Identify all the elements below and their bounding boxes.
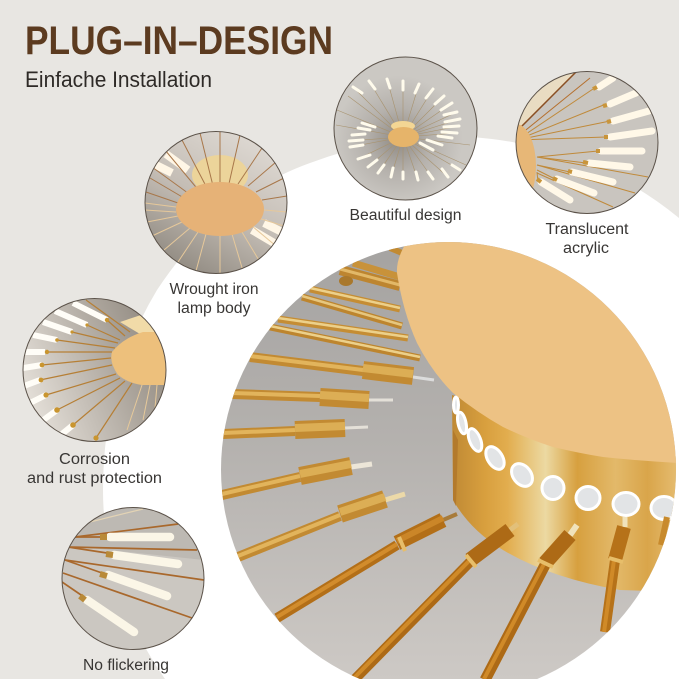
rod 8 [484, 525, 577, 679]
circle: translucent acrylic [516, 72, 658, 213]
ceiling disc [388, 127, 419, 147]
band wall edge [453, 430, 458, 506]
rod 1 [250, 356, 434, 380]
label: no flickering: No flickering [83, 657, 169, 674]
lamps [23, 303, 107, 434]
white backdrop shape [103, 137, 679, 679]
subtitle: Einfache Installation [25, 67, 212, 92]
rod 3 [223, 426, 368, 434]
bright top wedge [519, 74, 573, 126]
acrylic tubes [87, 537, 178, 632]
title: PLUG–IN–DESIGN [25, 19, 333, 63]
label: lamp body: lamp body [178, 300, 251, 317]
rods [336, 90, 470, 174]
rod 2 [232, 393, 393, 400]
rod 7 [353, 524, 518, 679]
label: and rust protection: and rust protection [27, 470, 162, 487]
main lamp close-up [221, 240, 679, 679]
label: acrylic: acrylic [563, 240, 609, 257]
pale rods [127, 385, 157, 430]
circle outline [62, 508, 204, 650]
gold sleeves [80, 537, 113, 600]
band [452, 395, 679, 592]
label: translucent: Translucent [546, 221, 629, 238]
rod 10 [661, 517, 667, 545]
ceiling disc [516, 124, 536, 188]
circle: wrought iron lamp body [145, 130, 287, 274]
circle: corrosion and rust protection [23, 298, 170, 442]
rods [62, 524, 204, 618]
rods [517, 87, 648, 207]
ceiling disc [397, 240, 679, 463]
gold sleeves [537, 87, 611, 182]
hub glow [391, 121, 415, 130]
dark rod [522, 72, 576, 126]
upper rods [270, 248, 420, 358]
circle: no flickering [62, 507, 204, 650]
lower radial rods [145, 203, 287, 274]
ceiling disc [176, 182, 264, 236]
circle: beautiful design [334, 57, 477, 200]
gold tips [39, 318, 109, 441]
label: wrought iron: Wrought iron [170, 281, 258, 298]
label: beautiful design: Beautiful design [350, 207, 462, 224]
rod 5 [238, 494, 405, 557]
rod 4 [222, 464, 372, 495]
upper radial rods [146, 130, 287, 203]
circle outline [334, 57, 477, 200]
circle outline [23, 298, 166, 442]
rod 9 [604, 517, 625, 632]
band holes [454, 397, 677, 520]
glowing lamps [349, 79, 460, 180]
circle outline [145, 132, 287, 274]
hub glow [192, 155, 248, 186]
faint rod [90, 509, 143, 522]
ceiling disc [111, 332, 170, 385]
acrylic tubes [541, 78, 652, 200]
rods [40, 300, 132, 438]
rod 6 [277, 514, 457, 618]
label: corrosion: Corrosion [59, 451, 130, 468]
lamp ends [156, 154, 282, 243]
circle outline [516, 72, 658, 214]
hub glow [120, 316, 154, 334]
